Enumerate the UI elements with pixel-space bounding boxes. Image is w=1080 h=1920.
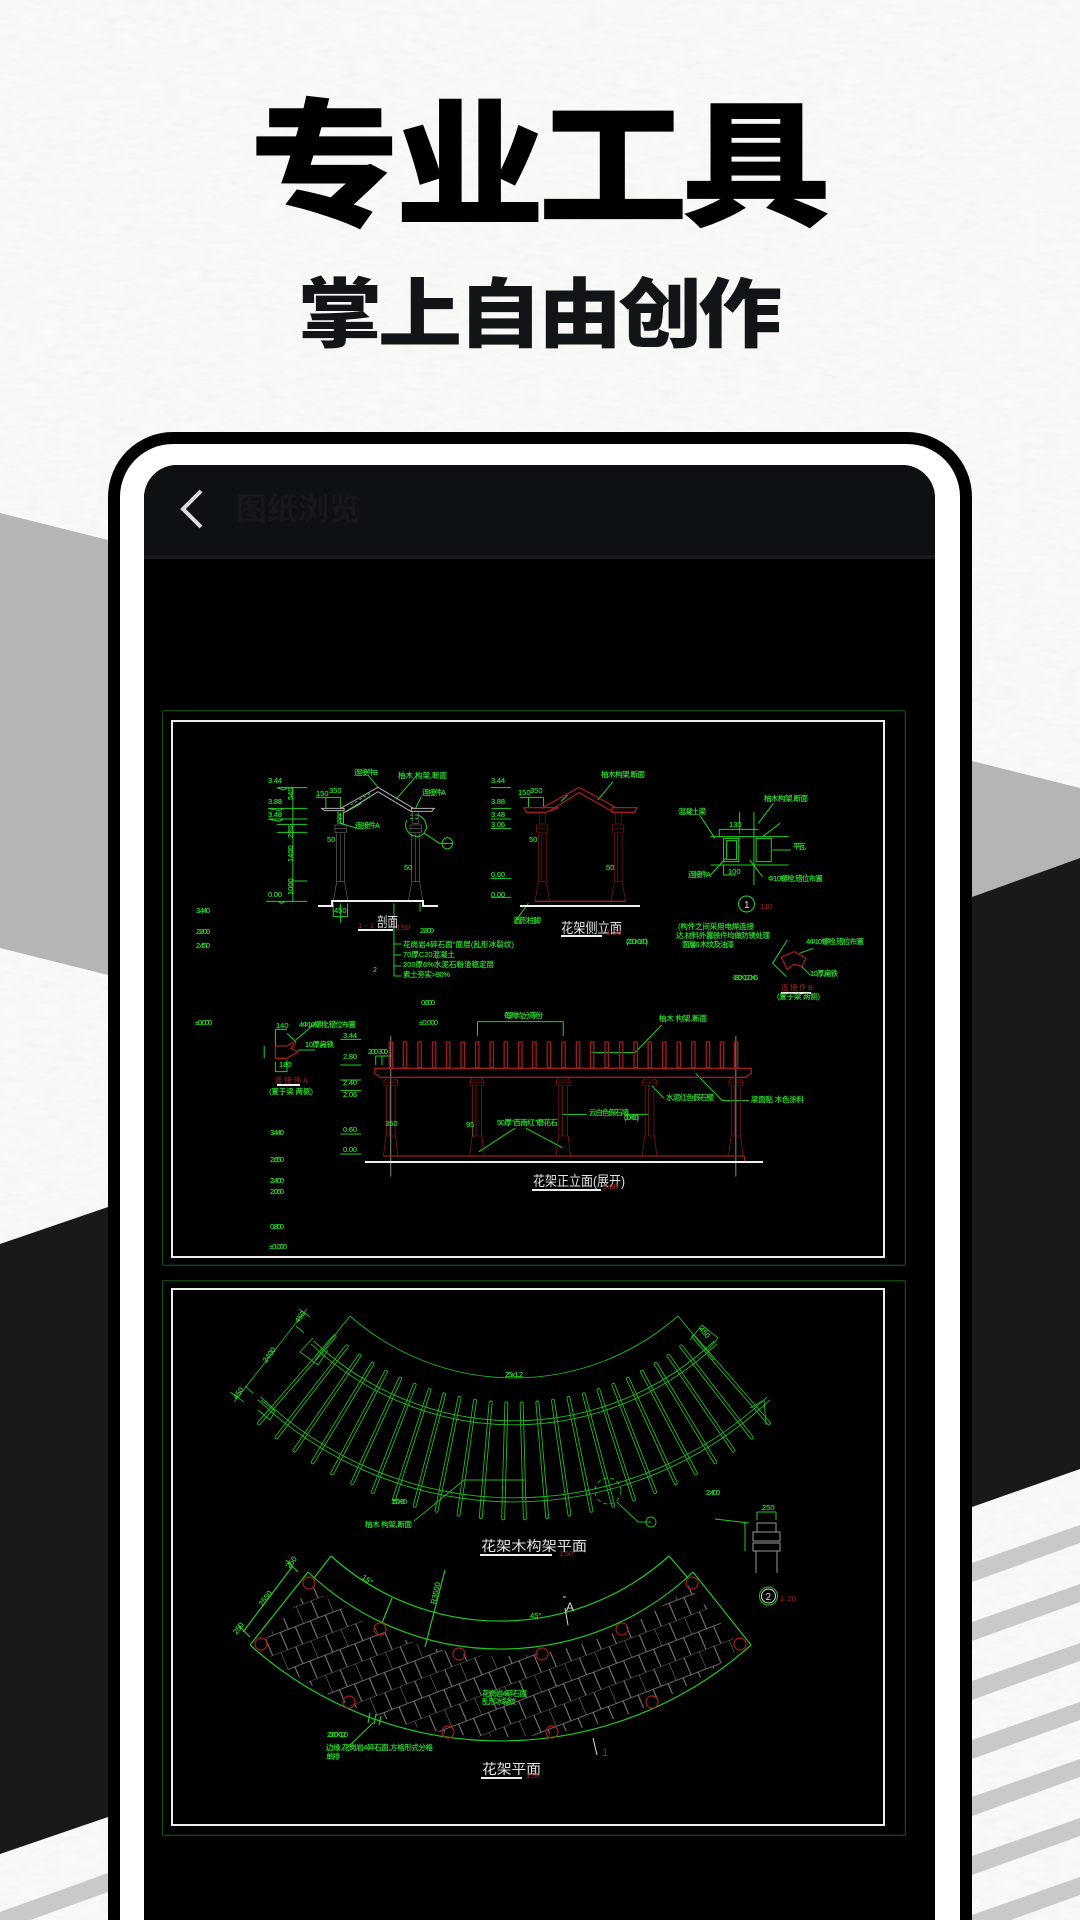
side elevation drawing: 3.44 <box>491 776 505 785</box>
paving plan drawing: 1:50 <box>526 1771 540 1780</box>
connector B drawing: 4Φ10螺栓,错位布置 <box>806 936 864 946</box>
timber frame plan drawing: 450 <box>231 1386 246 1401</box>
section 1-1 drawing: 3.44 <box>268 776 282 785</box>
subtitle: 作 <box>698 273 782 357</box>
detail 1 drawing: 100 <box>728 867 741 876</box>
detail 1 drawing: 连接件A <box>688 869 711 879</box>
timber frame plan drawing <box>230 1309 780 1573</box>
front elevation drawing: 50厚"西南红"磨花石 <box>497 1117 558 1127</box>
phone frame <box>108 432 972 1920</box>
paving plan drawing: 15° <box>360 1573 375 1587</box>
section 1-1 drawing: 450 <box>334 906 347 915</box>
subtitle: 掌 <box>298 273 382 357</box>
front elevation drawing: 云白色假石墙 <box>589 1107 630 1117</box>
header title: 图纸浏览 <box>236 492 360 527</box>
paving plan drawing: 乱形冰裂纹 <box>482 1696 516 1706</box>
title: 专 <box>249 91 400 245</box>
section 1-1 drawing: 70厚C20混凝土 <box>403 949 456 959</box>
section 1-1 drawing: 540 <box>286 787 295 800</box>
detail 1 drawing: 130 <box>729 820 742 829</box>
side elevation drawing <box>491 769 648 946</box>
section 1-1 drawing: 150 <box>316 789 329 798</box>
paving plan drawing <box>231 1555 751 1780</box>
section 1-1 drawing: 1-1 <box>358 921 374 930</box>
front elevation drawing: 2.450 <box>196 941 210 950</box>
detail 1 drawing: 混凝土梁 <box>678 806 706 816</box>
title: 具 <box>681 91 831 245</box>
side elevation drawing: 350 <box>530 786 543 795</box>
detail 1 drawing: 柚木构架,断面 <box>764 793 808 803</box>
detail 1 drawing: 1 <box>744 900 750 911</box>
section 1-1 drawing: 50 <box>327 835 335 844</box>
detail 2 marker: 1:20 <box>780 1594 796 1603</box>
title: 业 <box>395 91 545 245</box>
front elevation drawing: 200 300 <box>368 1047 388 1056</box>
paving plan drawing: 1 <box>602 1747 608 1759</box>
section 1-1 drawing: 2.800 <box>420 926 434 935</box>
detail 1 drawing: 1:10 <box>760 902 772 911</box>
connector B drawing: 10厚扁铁 <box>810 968 838 978</box>
side elevation drawing: 50 <box>529 835 537 844</box>
paving plan drawing: 45° <box>530 1611 541 1620</box>
section 1-1 drawing: 2 <box>373 967 377 974</box>
front elevation drawing: 2.80 <box>343 1052 357 1061</box>
section 1-1 drawing: 3.88 <box>268 797 282 806</box>
front elevation drawing: ±0.000 <box>419 1018 438 1027</box>
section 1-1 drawing: 剖面 <box>377 914 398 930</box>
connector A drawing: 连接件A <box>275 1075 308 1085</box>
side elevation drawing: 3.06 <box>491 820 505 829</box>
front elevation drawing: 柚木 构架,断面 <box>659 1013 708 1023</box>
subtitle: 自 <box>458 273 542 357</box>
paving plan drawing: A <box>566 1600 574 1614</box>
front elevation drawing: 水泥红色假石壁 <box>666 1092 714 1102</box>
timber frame plan drawing: 1:50 <box>559 1549 573 1558</box>
section 1-1 drawing: 0.00 <box>268 890 282 899</box>
paving plan drawing: 花岗岩4碎石面 <box>482 1688 528 1698</box>
front elevation drawing: 2.400 <box>270 1176 284 1185</box>
connector A drawing: 140 <box>276 1021 289 1030</box>
front elevation drawing: 0.800 <box>270 1222 284 1231</box>
section 1-1 drawing: 素土夯实>90% <box>403 969 450 979</box>
title <box>249 91 831 245</box>
connector A drawing: (置于梁 两侧) <box>269 1086 314 1096</box>
panel: drawing sheet 2 <box>162 1280 906 1836</box>
connector A drawing: 10厚扁铁 <box>305 1039 334 1049</box>
detail 2 marker: 2 <box>766 1592 772 1603</box>
connector B drawing: -180X120X6 <box>732 973 758 982</box>
detail 1 drawing: 平瓦 <box>793 842 806 851</box>
side elevation drawing: 50 <box>606 863 614 872</box>
front elevation drawing: 每跨均分,等份 <box>504 1010 544 1020</box>
panel: drawing sheet 1 <box>162 710 906 1266</box>
side elevation drawing: 0.00 <box>491 890 505 899</box>
side elevation drawing: 1:50 <box>606 928 621 937</box>
section 1-1 drawing: 50 <box>404 863 412 872</box>
timber frame plan drawing: 450 <box>697 1325 712 1340</box>
front elevation drawing: ±0.000 <box>269 1242 287 1251</box>
side elevation drawing: 3.48 <box>491 810 505 819</box>
background: angled grey and black bands <box>0 513 1080 1920</box>
section 1-1 drawing: 350 <box>329 786 342 795</box>
timber frame plan drawing: 花架木构架平面 <box>481 1538 587 1554</box>
title: 工 <box>538 91 688 245</box>
timber frame plan drawing: 2.400 <box>706 1488 720 1497</box>
front elevation drawing: 350 <box>385 1119 398 1128</box>
timber frame plan drawing: 2400 <box>261 1346 278 1364</box>
paving plan drawing: 边缘,花岗岩4碎石面,方格形式分格 <box>326 1742 434 1752</box>
timber frame plan drawing: 25x1.2 <box>505 1370 523 1379</box>
paving plan drawing: 250 <box>231 1621 246 1636</box>
section 1-1 drawing <box>266 767 514 979</box>
front elevation drawing: 0.00 <box>343 1145 357 1154</box>
front elevation drawing <box>195 906 804 1251</box>
section 1-1 drawing: 柚木 构架,断面 <box>398 770 448 780</box>
section 1-1 drawing: 连接件A <box>422 787 446 797</box>
connector B drawing: 连接件B <box>781 982 813 992</box>
side elevation drawing: 150 <box>518 788 531 797</box>
paving plan drawing: 250 <box>284 1555 299 1570</box>
subtitle: 由 <box>538 273 622 357</box>
paving plan drawing: 2500X120 <box>327 1730 348 1739</box>
front elevation drawing: 95 <box>466 1120 474 1129</box>
front elevation drawing: 2.800 <box>196 927 210 936</box>
section 1-1 drawing: 3.48 <box>268 810 282 819</box>
app header bar <box>144 465 935 559</box>
section 1-1 drawing: 200厚6%水泥石粉渣稳定层 <box>403 959 494 969</box>
detail 1 drawing: 达,材料外露铁件均做防锈处理 <box>676 930 770 940</box>
front elevation drawing: 3.44 <box>343 1031 357 1040</box>
subtitle <box>298 273 782 357</box>
section 1-1 drawing: 1400 <box>286 845 295 862</box>
front elevation drawing: 2.40 <box>343 1078 357 1087</box>
front elevation drawing: 花架正立面(展开) <box>533 1173 625 1189</box>
timber frame plan drawing: 150X90 <box>391 1497 407 1506</box>
detail 1 drawing: (构件之间采用电焊连接 <box>678 921 754 931</box>
side elevation drawing: 圆形柱脚 <box>514 915 541 925</box>
front elevation drawing: 1:50 <box>603 1182 618 1191</box>
timber frame plan drawing: 450 <box>293 1309 308 1325</box>
front elevation drawing: (30X90) <box>624 1113 640 1122</box>
detail 2 marker <box>760 1587 796 1605</box>
front elevation drawing: 2.06 <box>343 1090 357 1099</box>
front elevation drawing: 3.440 <box>196 906 210 915</box>
subtitle: 创 <box>618 273 702 357</box>
front elevation drawing: 2.650 <box>270 1155 284 1164</box>
front elevation drawing: 2.060 <box>270 1187 284 1196</box>
connector B drawing <box>732 936 864 1001</box>
side elevation drawing: 3.88 <box>491 797 505 806</box>
front elevation drawing: 3.440 <box>270 1128 284 1137</box>
icon: back chevron <box>183 491 201 527</box>
side elevation drawing: (250X180) <box>626 937 648 946</box>
connector B drawing: (置于梁 两侧) <box>777 991 820 1001</box>
subtitle: 上 <box>378 273 462 357</box>
side elevation drawing: 柚木构架,断面 <box>601 769 646 779</box>
front elevation drawing: ±0.000 <box>195 1018 212 1027</box>
section 1-1 drawing: 1000 <box>286 878 295 895</box>
paving plan drawing: R3500 <box>429 1581 442 1605</box>
detail 1 drawing: Φ10螺栓,错位布置 <box>768 873 824 883</box>
side elevation drawing: 花架侧立面 <box>561 920 622 936</box>
paving plan drawing: 2550 <box>257 1589 274 1608</box>
connector A drawing: 180 <box>279 1060 292 1069</box>
section 1-1 drawing: 1:50 <box>396 923 410 932</box>
connector A drawing: 4Φ10螺栓,错位布置 <box>299 1019 356 1029</box>
section 1-1 drawing: 220 <box>286 825 295 838</box>
detail 1 drawing <box>676 793 824 949</box>
section 1-1 drawing: 连接件B <box>354 767 378 777</box>
side elevation drawing: 0.60 <box>491 870 505 879</box>
paving plan drawing: 花架平面 <box>482 1761 541 1777</box>
paving plan drawing: 单排 <box>326 1751 340 1761</box>
section 1-1 drawing: 花岗岩4碎石面"面层(乱形冰裂纹) <box>403 939 514 949</box>
detail 1 drawing: 面層6 木纹及油漆 <box>682 939 734 949</box>
timber frame plan drawing: 柚木 构架,断面 <box>365 1519 412 1529</box>
connector A drawing <box>264 1019 356 1096</box>
front elevation drawing: 0.600 <box>421 998 435 1007</box>
timber frame plan drawing: 250 <box>762 1503 775 1512</box>
front elevation drawing: 梁面贴 木色涂料 <box>751 1094 804 1104</box>
section 1-1 drawing: 连接件A <box>355 820 380 830</box>
front elevation drawing: 0.60 <box>343 1125 357 1134</box>
